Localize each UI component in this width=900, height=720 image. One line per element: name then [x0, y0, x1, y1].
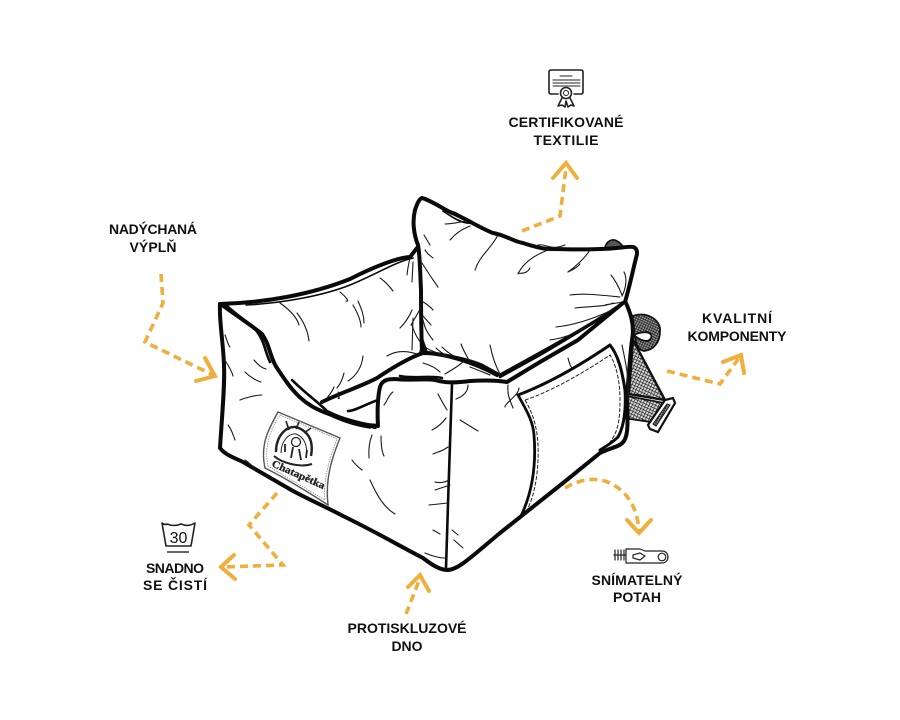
brand label	[263, 412, 340, 505]
heading: anti-slip bottom	[348, 620, 466, 654]
left wall top edge	[220, 248, 633, 570]
icon: wash at 30 degrees	[162, 523, 195, 552]
icon: certificate	[549, 70, 583, 107]
heading: certified textiles: TEXTILIE	[534, 132, 598, 148]
icon: wash at 30 degrees: 30	[170, 530, 188, 547]
arrow: anti-slip bottom	[406, 575, 429, 614]
heading: fluffy filling: VÝPLŇ	[130, 238, 176, 255]
heading: anti-slip bottom: DNO	[392, 638, 423, 654]
heading: certified textiles: CERTIFIKOVANÉ	[508, 114, 624, 130]
heading: anti-slip bottom: PROTISKLUZOVÉ	[348, 620, 466, 636]
pocket	[518, 345, 628, 518]
left wall wrinkles	[225, 278, 393, 470]
heading: easy to clean	[143, 560, 208, 593]
pillow tab	[605, 240, 625, 248]
arrow: certified textiles	[522, 163, 577, 231]
heading: fluffy filling	[109, 220, 197, 255]
arrow: removable cover	[565, 479, 651, 533]
heading: quality components: KOMPONENTY	[688, 328, 787, 344]
arrow: easy to clean	[221, 493, 283, 579]
bed body	[220, 198, 637, 570]
arrow: fluffy filling	[145, 274, 215, 381]
seat cushion	[322, 325, 497, 411]
heading: removable cover: SNÍMATELNÝ	[592, 571, 683, 588]
heading: easy to clean: SNADNO	[146, 560, 204, 576]
brand logo: Chatapětka	[270, 459, 327, 492]
strap and buckle	[623, 314, 675, 432]
heading: easy to clean: SE ČISTÍ	[143, 576, 208, 593]
heading: certified textiles	[508, 114, 624, 148]
heading: fluffy filling: NADÝCHANÁ	[109, 220, 197, 237]
heading: removable cover: POTAH	[613, 589, 661, 605]
heading: quality components	[688, 310, 787, 344]
heading: removable cover	[592, 571, 683, 605]
illustration: pet car seat bed	[220, 198, 675, 570]
arrow: quality components	[667, 355, 744, 384]
front block and cushion rim	[352, 303, 623, 568]
icon: zipper	[614, 549, 668, 563]
pillow	[400, 198, 637, 375]
heading: quality components: KVALITNÍ	[702, 310, 773, 326]
